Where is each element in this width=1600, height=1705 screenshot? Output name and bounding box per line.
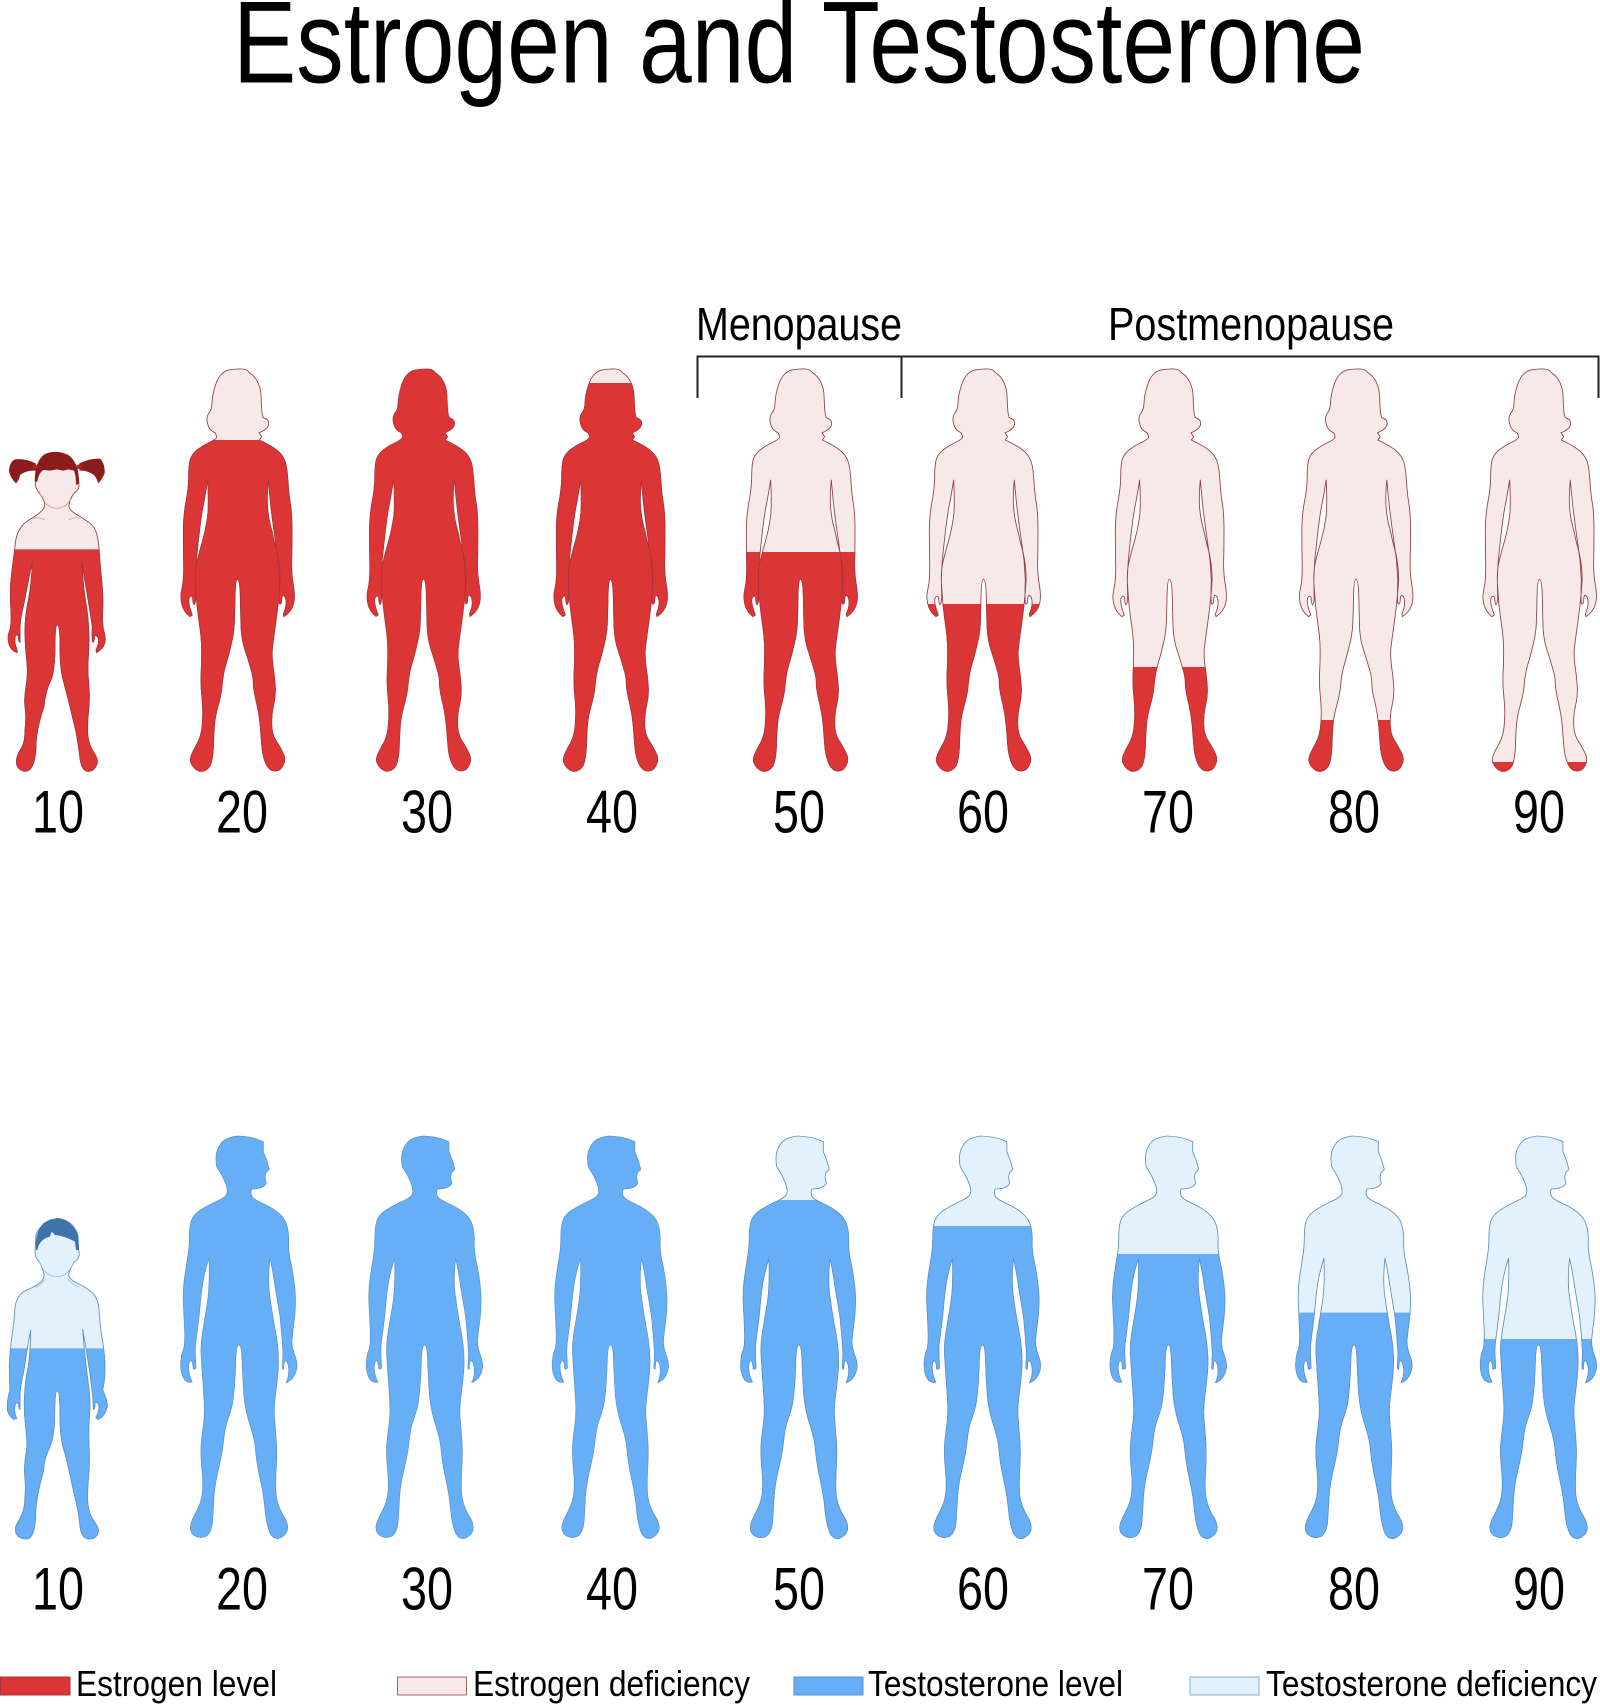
legend	[0, 1663, 1597, 1704]
age 30: 30	[401, 1556, 453, 1622]
age 60: 60	[957, 1556, 1009, 1622]
panel: estrogen levels by age	[8, 369, 1596, 771]
age 70: 70	[1142, 779, 1194, 846]
postmenopause heading: Postmenopause	[1108, 298, 1394, 350]
postmenopause bracket	[902, 356, 1598, 398]
age 40: 40	[586, 1556, 638, 1622]
menopause bracket	[698, 356, 902, 398]
figure: man age 20 testosterone	[181, 1136, 297, 1539]
figure: man age 30 testosterone	[366, 1136, 483, 1539]
figure: woman age 80 estrogen	[1299, 369, 1413, 771]
figure: girl age 10 estrogen	[8, 452, 105, 771]
age 30: 30	[401, 779, 453, 846]
figure: man age 50 testosterone	[741, 1136, 857, 1539]
figure: boy age 10 testosterone	[7, 1218, 107, 1539]
figure: man age 70 testosterone	[1110, 1136, 1226, 1539]
estrogen age labels	[32, 779, 1565, 846]
age 60: 60	[957, 779, 1009, 846]
age 10: 10	[32, 1556, 84, 1622]
figure: woman age 70 estrogen	[1113, 369, 1226, 771]
figure: woman age 20 estrogen	[181, 369, 294, 771]
age 20: 20	[216, 1556, 268, 1622]
age 40: 40	[586, 779, 638, 846]
age 20: 20	[216, 779, 268, 846]
legend: estrogen deficiency: Estrogen deficiency	[473, 1663, 750, 1704]
age 80: 80	[1328, 779, 1380, 846]
menopause heading: Menopause	[696, 298, 902, 350]
age 90: 90	[1513, 1556, 1565, 1622]
testosterone age labels	[32, 1556, 1565, 1622]
figure: woman age 90 estrogen	[1483, 369, 1596, 771]
figure: woman age 60 estrogen	[927, 369, 1040, 771]
figure: man age 40 testosterone	[552, 1136, 669, 1539]
age 50: 50	[773, 779, 825, 846]
figure: man age 60 testosterone	[924, 1136, 1041, 1539]
age 70: 70	[1142, 1556, 1194, 1622]
panel: testosterone levels by age	[7, 1136, 1597, 1539]
legend: testosterone level: Testosterone level	[868, 1663, 1123, 1704]
legend: estrogen level	[0, 1663, 277, 1704]
legend: estrogen level: Estrogen level	[76, 1663, 277, 1704]
age 90: 90	[1513, 779, 1565, 846]
age 50: 50	[773, 1556, 825, 1622]
figure: man age 80 testosterone	[1296, 1136, 1412, 1539]
figure: woman age 50 estrogen	[744, 369, 857, 771]
figure: woman age 40 estrogen	[554, 369, 667, 771]
age 80: 80	[1328, 1556, 1380, 1622]
figure: man age 90 testosterone	[1480, 1136, 1597, 1539]
age 10: 10	[32, 779, 84, 846]
figure: woman age 30 estrogen	[367, 369, 480, 771]
